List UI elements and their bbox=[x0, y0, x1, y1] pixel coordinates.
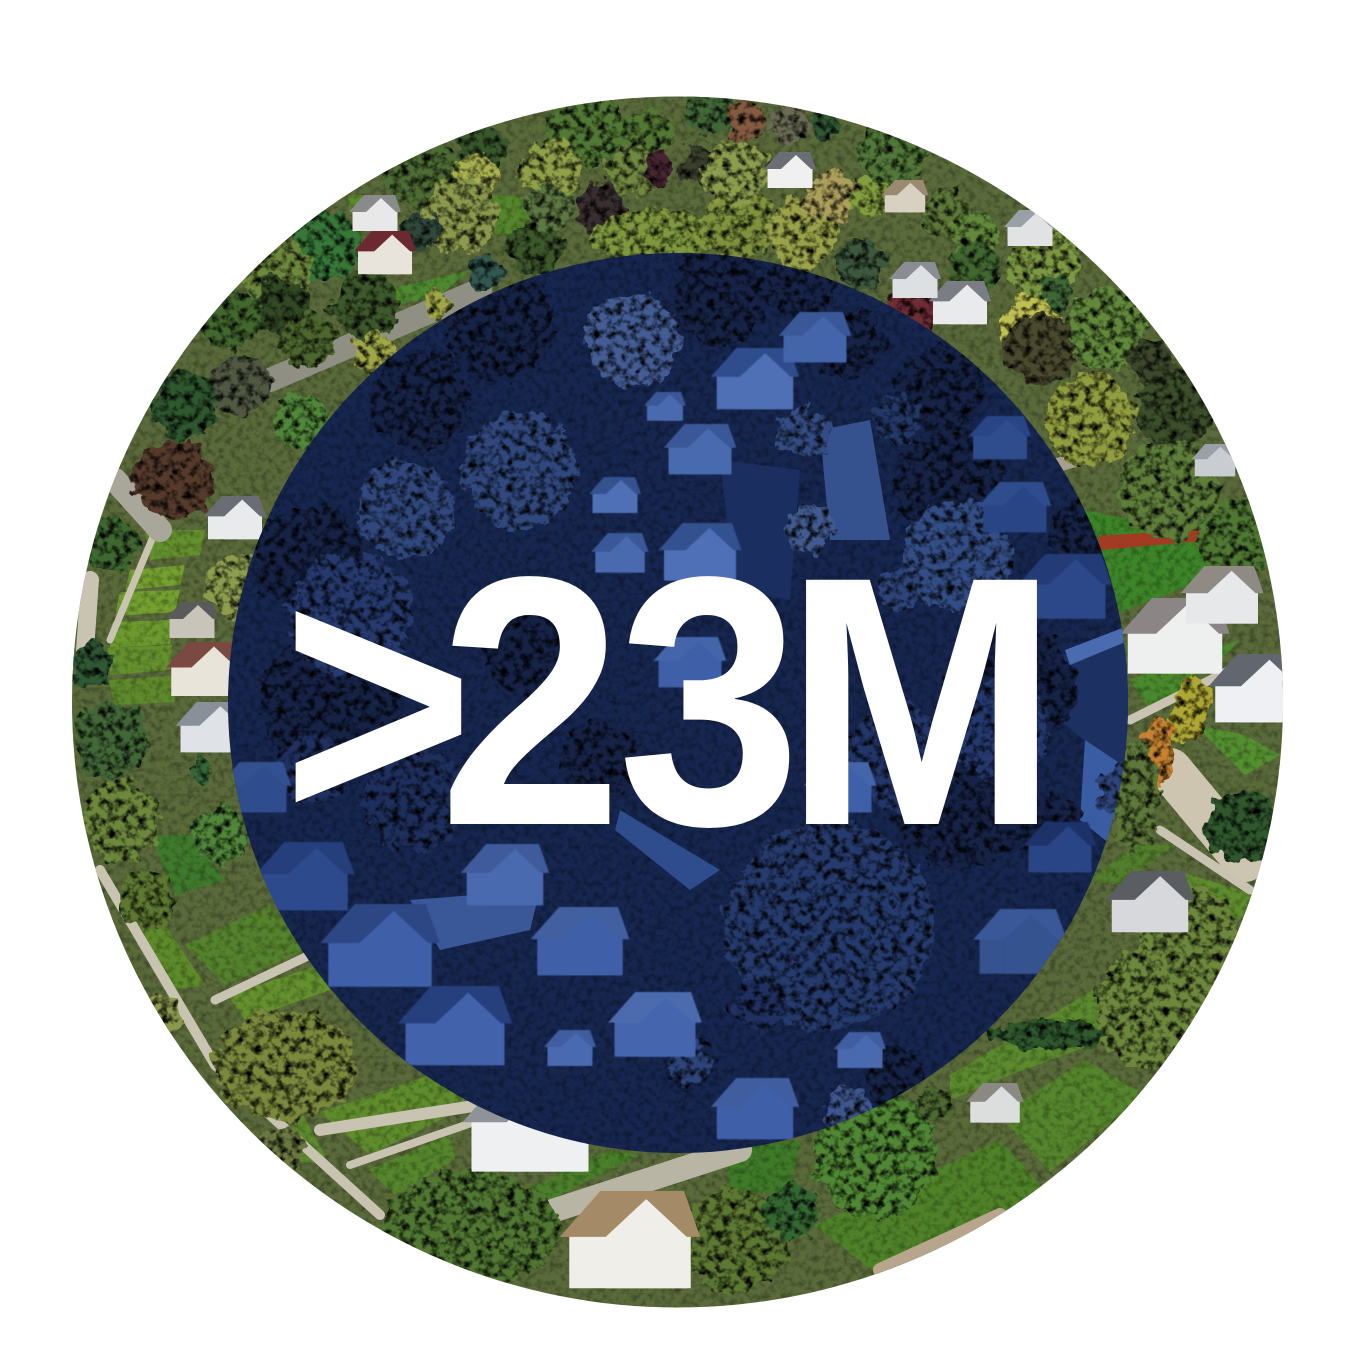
navy base bbox=[220, 245, 1140, 1165]
infographic: neighbourhood photo circle with statistic bbox=[72, 96, 1283, 1308]
streets and sidewalks bbox=[85, 290, 1250, 1270]
navy overlay circle bbox=[219, 245, 1145, 1165]
trees outside the circle bbox=[70, 85, 1282, 1292]
houses inside the circle bbox=[219, 312, 1112, 1139]
mid-tone trees bbox=[275, 292, 1145, 1132]
statistic: >23M: >23M bbox=[282, 503, 1059, 900]
yard texture bbox=[220, 245, 1140, 1165]
dark trees bbox=[255, 245, 1110, 1105]
red fence bbox=[1098, 530, 1200, 550]
driveways and yards bbox=[410, 420, 1130, 950]
houses outside the circle bbox=[166, 152, 1307, 1288]
lawns bbox=[108, 195, 1280, 1285]
